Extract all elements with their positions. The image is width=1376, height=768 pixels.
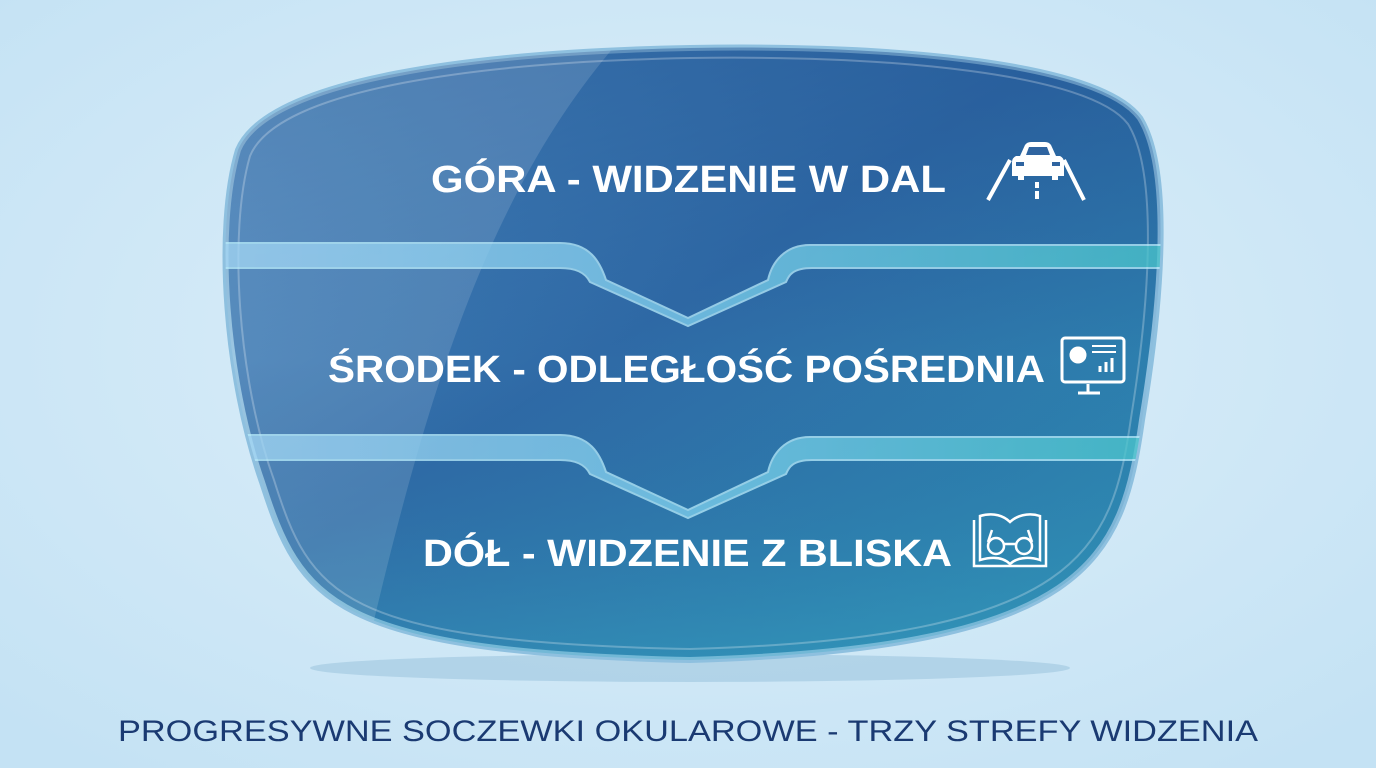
heading: top zone: GÓRA - WIDZENIE W DAL — [431, 157, 946, 201]
band 1 with chevron — [200, 243, 1200, 326]
icon: car on road — [988, 142, 1084, 200]
footer title: PROGRESYWNE SOCZEWKI OKULAROWE - TRZY STREFY WIDZENIA — [118, 715, 1258, 748]
lens — [200, 40, 1200, 680]
lens shadow — [310, 654, 1070, 682]
icon: book with glasses — [974, 514, 1046, 566]
band 2 with chevron — [200, 435, 1200, 518]
heading: bottom zone: DÓŁ - WIDZENIE Z BLISKA — [423, 531, 952, 575]
heading: middle zone: ŚRODEK - ODLEGŁOŚĆ POŚREDNIA — [328, 347, 1045, 391]
icon: monitor with chart — [1062, 338, 1124, 393]
